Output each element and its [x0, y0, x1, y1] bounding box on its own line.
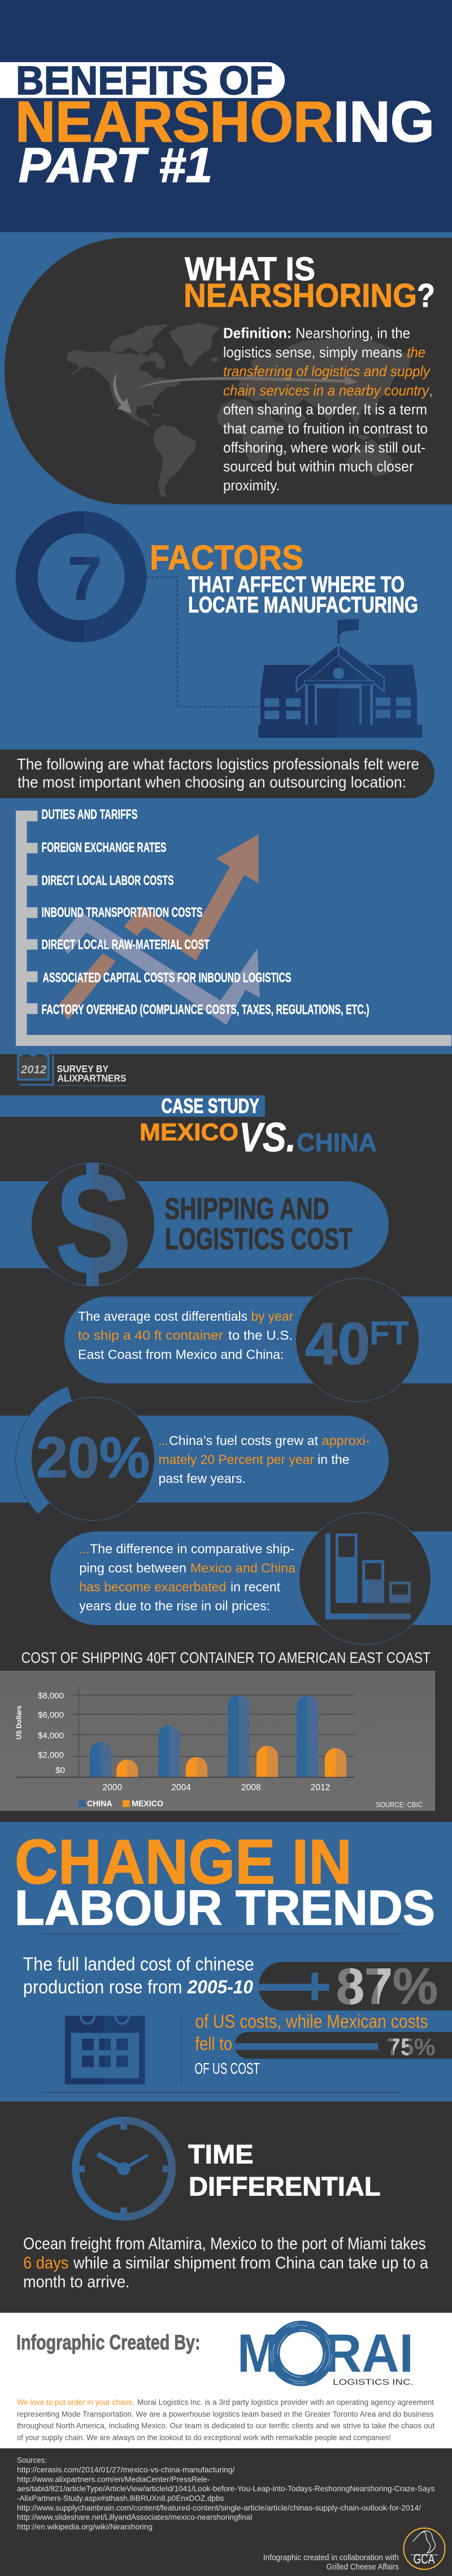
heading: time differential: [188, 2139, 381, 2201]
time differential text: month to arrive.: [23, 2273, 130, 2291]
arrow: blue-grey trend: [58, 912, 260, 1025]
stat: plus 87 percent: [257, 1959, 452, 2015]
about text: Morai Logistics Inc. is a 3rd party logistics provider with an operating agency agreement: [137, 2397, 434, 2407]
landed cost text: [23, 1953, 254, 1998]
logo: morai logistics: LOGISTICS INC.: [333, 2378, 414, 2387]
icon: number 7 ring: 7: [68, 544, 102, 612]
collaboration credit: Grilled Cheese Affairs: [327, 2562, 399, 2571]
bars: mexico: [116, 1746, 346, 1777]
sources: -AlixPartners-Study.aspx#sthash.8iBRUXn8.p0EnxDOZ.dpbs: [17, 2494, 224, 2503]
factor list bracket: [16, 811, 451, 1046]
fuel cost text: China’s fuel costs grew at: [169, 1433, 318, 1448]
panel: credits: [16, 2323, 434, 2442]
intro pill text: the most important when choosing an outsourcing location:: [18, 773, 406, 791]
heading: shipping and logistics cost: SHIPPING AND: [164, 1192, 329, 1226]
factor list: FOREIGN EXCHANGE RATES: [42, 840, 166, 855]
arrow: orange trend: [59, 834, 259, 1020]
heading: what is nearshoring: ?: [417, 277, 435, 314]
survey by alixpartners: ALIXPARTNERS: [58, 1072, 127, 1084]
fuel cost text: past few years.: [158, 1471, 246, 1486]
40ft text: by year: [251, 1309, 293, 1324]
factor list: [42, 807, 370, 1017]
x axis labels: 2012: [311, 1783, 330, 1792]
heading: shipping and logistics cost: LOGISTICS COST: [165, 1222, 353, 1256]
about text: throughout North America, including Mexico. Our team is dedicated to our terrific clients and we strive to take the chaos out: [17, 2421, 434, 2430]
stat: plus 87 percent: 87%: [336, 1959, 438, 2015]
definition text: often sharing a border. It is a term: [223, 401, 427, 418]
heading: what is nearshoring: WHAT IS: [185, 251, 315, 288]
panel: seven factors: [0, 522, 451, 1046]
sources: aes/tabid/821/articleType/ArticleView/articleId/1041/Look-before-You-Leap-into-Todays-ReshoringNearshoring-Craze-Says: [17, 2484, 434, 2493]
y axis labels: $4,000: [38, 1731, 64, 1740]
sources: Sources:: [17, 2456, 47, 2465]
title: nearshoring: ING: [333, 89, 434, 154]
decorative trend arrows: [58, 834, 260, 1025]
icon: number 7 ring: [27, 522, 136, 632]
panel: time differential: [23, 2121, 428, 2291]
mexican costs text: [194, 2011, 428, 2077]
survey by alixpartners: [56, 1063, 129, 1086]
40ft badge: FT: [370, 1315, 409, 1352]
heading: mexico vs china: CHINA: [297, 1128, 377, 1157]
legend: CHINA: [87, 1800, 112, 1809]
icon: descending bars: [299, 1513, 431, 1644]
arrow: long route toward china: [138, 376, 358, 389]
x axis labels: 2008: [241, 1783, 261, 1792]
legend: [79, 1800, 163, 1809]
definition text: logistics sense, simply means: [223, 343, 402, 360]
heading: time differential: DIFFERENTIAL: [189, 2172, 381, 2201]
40ft badge: 40: [305, 1311, 370, 1377]
heading: case study: [0, 1094, 265, 1117]
x axis labels: 2004: [171, 1783, 191, 1792]
definition text: sourced but within much closer: [223, 458, 414, 475]
oil price text: [79, 1542, 296, 1613]
intro pill text: The following are what factors logistics professionals felt were: [17, 755, 419, 773]
oil price text: in recent: [231, 1579, 280, 1594]
mexican costs text: fell to: [195, 2033, 232, 2054]
stat: 75 percent: [234, 2032, 452, 2061]
sources: http://en.wikipedia.org/wiki/Nearshoring: [17, 2522, 153, 2531]
icon: 2012 calendar: [18, 1055, 54, 1086]
definition text: transferring of logistics and supply: [223, 363, 431, 380]
world map with arrows: [67, 323, 412, 497]
logo: morai logistics: RAI: [324, 2323, 414, 2384]
intro pill text: [0, 750, 434, 798]
panel: shipping and logistics cost: [0, 1146, 389, 1302]
definition text: that came to fruition in contrast to: [223, 420, 428, 437]
factor list: INBOUND TRANSPORTATION COSTS: [42, 905, 202, 920]
definition text: [223, 324, 432, 494]
heading: mexico vs china: [140, 1115, 377, 1160]
heading: mexico vs china: VS.: [239, 1115, 296, 1160]
20 percent badge: [16, 1386, 154, 1521]
logo: morai logistics: [237, 2323, 414, 2387]
sources: http://www.slideshare.net/LillyandAssociates/mexico-nearshoringfinal: [17, 2513, 252, 2522]
y axis labels: $2,000: [38, 1750, 64, 1760]
title block: [0, 59, 434, 193]
heading: change in labour trends: CHANGE IN: [15, 1827, 352, 1897]
oil price text: years due to the rise in oil prices:: [79, 1599, 270, 1613]
icon: dollar sign: S: [55, 1146, 132, 1302]
20 percent badge: 20%: [36, 1425, 150, 1490]
40ft text: to the U.S.: [228, 1328, 293, 1342]
icon: calendar: [65, 2016, 145, 2085]
landed cost text: 2005-10: [187, 1976, 254, 1998]
icon: factory building: [258, 619, 422, 738]
definition text: chain services in a nearby country: [223, 382, 430, 399]
about text: of your supply chain. We are always on the lookout to do exceptional work with remarkable people and companies!: [17, 2433, 391, 2442]
fuel cost text: mately 20 Percent per year: [158, 1452, 314, 1467]
oil price text: has become exacerbated: [79, 1579, 227, 1594]
arrow: curved toward mexico: [113, 373, 132, 414]
panel: change in labour trends: [15, 1827, 452, 2093]
40ft text: East Coast from Mexico and China:: [78, 1347, 284, 1361]
about text: We love to put order in your chaos.: [17, 2397, 134, 2407]
fuel cost text: in the: [318, 1452, 349, 1467]
40ft text: to ship a 40 ft container: [78, 1328, 223, 1342]
40ft badge: [296, 1278, 419, 1402]
mexican costs text: OF US COST: [194, 2060, 260, 2077]
40ft text: [78, 1309, 293, 1361]
heading: what is nearshoring: [184, 251, 435, 314]
stat: 75 percent: 75%: [387, 2034, 435, 2061]
y axis labels: $0: [55, 1766, 65, 1775]
bars: china: [90, 1695, 318, 1777]
about text: [17, 2397, 434, 2442]
landed cost text: production rose from: [23, 1976, 182, 1998]
x axis labels: 2000: [102, 1783, 122, 1792]
logo: gca: [403, 2528, 445, 2569]
heading: what is nearshoring: NEARSHORING: [184, 277, 417, 314]
subheading: that affect where to locate manufacturing: [188, 572, 418, 617]
created by heading: Infographic Created By:: [16, 2331, 201, 2354]
title pill: benefits of: BENEFITS OF: [16, 59, 273, 103]
panel: what is nearshoring: [5, 238, 452, 504]
factor list: DIRECT LOCAL LABOR COSTS: [42, 873, 174, 888]
y axis labels: $6,000: [38, 1711, 64, 1720]
logo: morai logistics: M: [237, 2323, 278, 2384]
panel: oil price difference: [50, 1513, 452, 1644]
bar chart: shipping cost by year: [0, 1671, 435, 1811]
source: SOURCE: CBIC: [376, 1801, 423, 1809]
panel: 40ft container: [64, 1278, 452, 1402]
collaboration credit: [263, 2553, 399, 2571]
definition text: the: [407, 343, 425, 360]
40ft text: The average cost differentials: [78, 1309, 247, 1324]
definition text: Definition:: [223, 324, 292, 341]
time differential text: 6 days: [23, 2253, 68, 2272]
oil price text: Mexico and China: [190, 1560, 296, 1575]
heading: case study: CASE STUDY: [162, 1094, 259, 1117]
oil price text: ...: [79, 1542, 89, 1556]
definition text: ,: [429, 382, 432, 399]
factor list: DUTIES AND TARIFFS: [42, 807, 138, 823]
y axis title: US Dollars: [16, 1705, 23, 1739]
sources: http://cerasis.com/2014/01/27/mexico-vs-china-manufacturing/: [17, 2465, 235, 2474]
about text: representing Mode Transportation. We are a powerhouse logistics team based in the Greater Toronto Area and do business: [17, 2409, 434, 2418]
oil price text: The difference in comparative ship-: [90, 1542, 294, 1556]
fuel cost text: [158, 1433, 370, 1486]
oil price text: ping cost between: [79, 1560, 186, 1575]
icon: clock: [76, 2121, 172, 2217]
time differential text: [23, 2235, 428, 2291]
factor list: ASSOCIATED CAPITAL COSTS FOR INBOUND LOGISTICS: [43, 971, 292, 985]
legend: MEXICO: [132, 1800, 163, 1809]
heading: factors: FACTORS: [150, 538, 303, 577]
title: part 1: PART #1: [19, 138, 212, 193]
x axis labels: [102, 1783, 330, 1792]
definition text: Nearshoring, in the: [295, 324, 410, 341]
collaboration credit: Infographic created in collaboration with: [263, 2553, 399, 2562]
definition text: offshoring, where work is still out-: [223, 439, 425, 456]
landed cost text: The full landed cost of chinese: [23, 1953, 254, 1974]
sources: http://www.alixpartners.com/en/MediaCenter/PressRele-: [17, 2474, 210, 2483]
survey credit: [18, 1055, 129, 1086]
icon: 2012 calendar: 2012: [20, 1064, 46, 1076]
heading: change in labour trends: [15, 1827, 435, 1935]
title: nearshoring: NEARSHOR: [15, 89, 333, 154]
heading: time differential: TIME: [188, 2139, 253, 2169]
heading: mexico vs china: MEXICO: [140, 1119, 238, 1146]
panel: 20 percent fuel costs: [0, 1386, 389, 1521]
logo: gca: GCA: [414, 2552, 434, 2567]
survey by alixpartners: SURVEY BY: [56, 1063, 108, 1074]
heading: change in labour trends: LABOUR TRENDS: [15, 1881, 435, 1935]
factor list: DIRECT LOCAL RAW-MATERIAL COST: [42, 937, 210, 952]
definition text: proximity.: [223, 477, 280, 494]
sources: [17, 2456, 434, 2531]
fuel cost text: approxi-: [322, 1433, 370, 1448]
fuel cost text: ...: [158, 1433, 168, 1448]
sources: http://www.supplychainbrain.com/content/featured-content/single-article/article/chinas-supply-chain-outlook-for-2014/: [17, 2503, 421, 2512]
y axis labels: [38, 1691, 65, 1775]
heading: shipping and logistics cost: [164, 1192, 353, 1256]
y axis labels: $8,000: [38, 1691, 64, 1700]
